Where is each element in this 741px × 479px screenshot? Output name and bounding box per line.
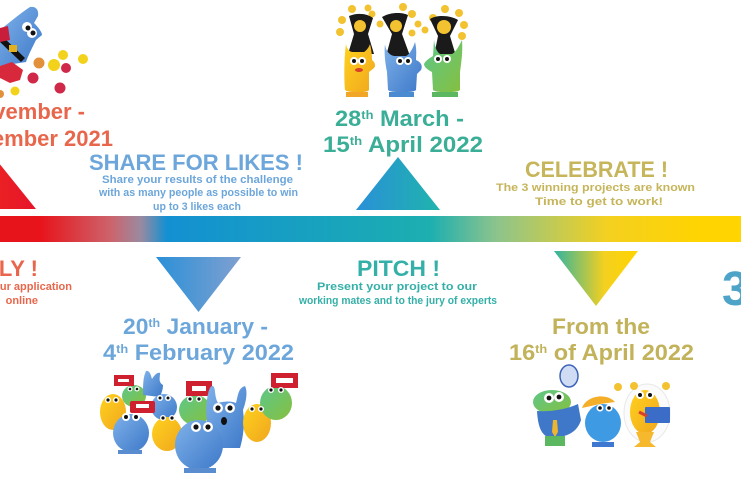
date: step 3: April 2022 <box>362 132 483 157</box>
date: step 2: 20 <box>123 314 147 339</box>
heading and text: pitch <box>298 256 497 307</box>
date: step 2: February 2022 <box>128 340 294 365</box>
icon: creature crowd with speech bubbles <box>100 371 298 473</box>
heading and text: pitch: PITCH ! <box>357 256 440 281</box>
date: step 4: th <box>535 342 547 356</box>
date: step 3: th <box>350 134 362 148</box>
date: step 2: January - <box>160 314 268 339</box>
panel: step 1 apply <box>0 7 113 307</box>
date: step 4 <box>509 314 694 365</box>
heading and text: share for likes: SHARE FOR LIKES ! <box>89 150 303 175</box>
panel: step 2 share for likes <box>89 150 303 473</box>
heading and text: pitch: working mates and to the jury of experts <box>298 295 497 307</box>
date: step 3: 28 <box>335 106 359 131</box>
date: step 2 <box>103 314 294 365</box>
date: step 2: th <box>148 316 160 330</box>
triangle: step 3 <box>356 157 440 210</box>
triangle: step 4 <box>554 251 638 306</box>
heading and text: celebrate: CELEBRATE ! <box>525 157 668 182</box>
date: step 3: March - <box>373 106 464 131</box>
heading and text: pitch: Present your project to our <box>317 281 478 293</box>
triangle: step 2 <box>156 257 241 312</box>
heading and text: celebrate <box>496 157 695 208</box>
date: step 4: From the <box>552 314 650 339</box>
date: step 4: of April 2022 <box>547 340 694 365</box>
date: step 4: 16 <box>509 340 533 365</box>
heading and text: apply <box>0 256 72 307</box>
panel: step 3 pitch <box>298 3 497 307</box>
heading and text: share for likes: Share your results of the challenge <box>102 174 293 186</box>
heading and text: share for likes <box>89 150 303 213</box>
date: step 2: 4 <box>103 340 115 365</box>
icon: creature with confetti <box>0 7 88 98</box>
triangle: step 1 <box>0 157 36 209</box>
heading and text: share for likes: with as many people as possible to win <box>98 187 298 199</box>
icon: three creatures with bulb and laptop <box>533 365 670 447</box>
heading and text: celebrate: Time to get to work! <box>535 196 663 208</box>
icon: three creatures with light bulbs <box>336 3 468 97</box>
heading and text: share for likes: up to 3 likes each <box>153 201 241 213</box>
panel: step 4 celebrate <box>496 157 695 447</box>
gradient timeline bar <box>0 216 741 242</box>
heading and text: apply: online <box>6 295 38 307</box>
date: step 2: th <box>116 342 128 356</box>
date: step 3 <box>323 106 483 157</box>
date: step 1 <box>0 99 113 151</box>
date: step 3: 15 <box>323 132 347 157</box>
date: step 3: th <box>361 108 373 122</box>
heading and text: celebrate: The 3 winning projects are known <box>496 182 695 194</box>
